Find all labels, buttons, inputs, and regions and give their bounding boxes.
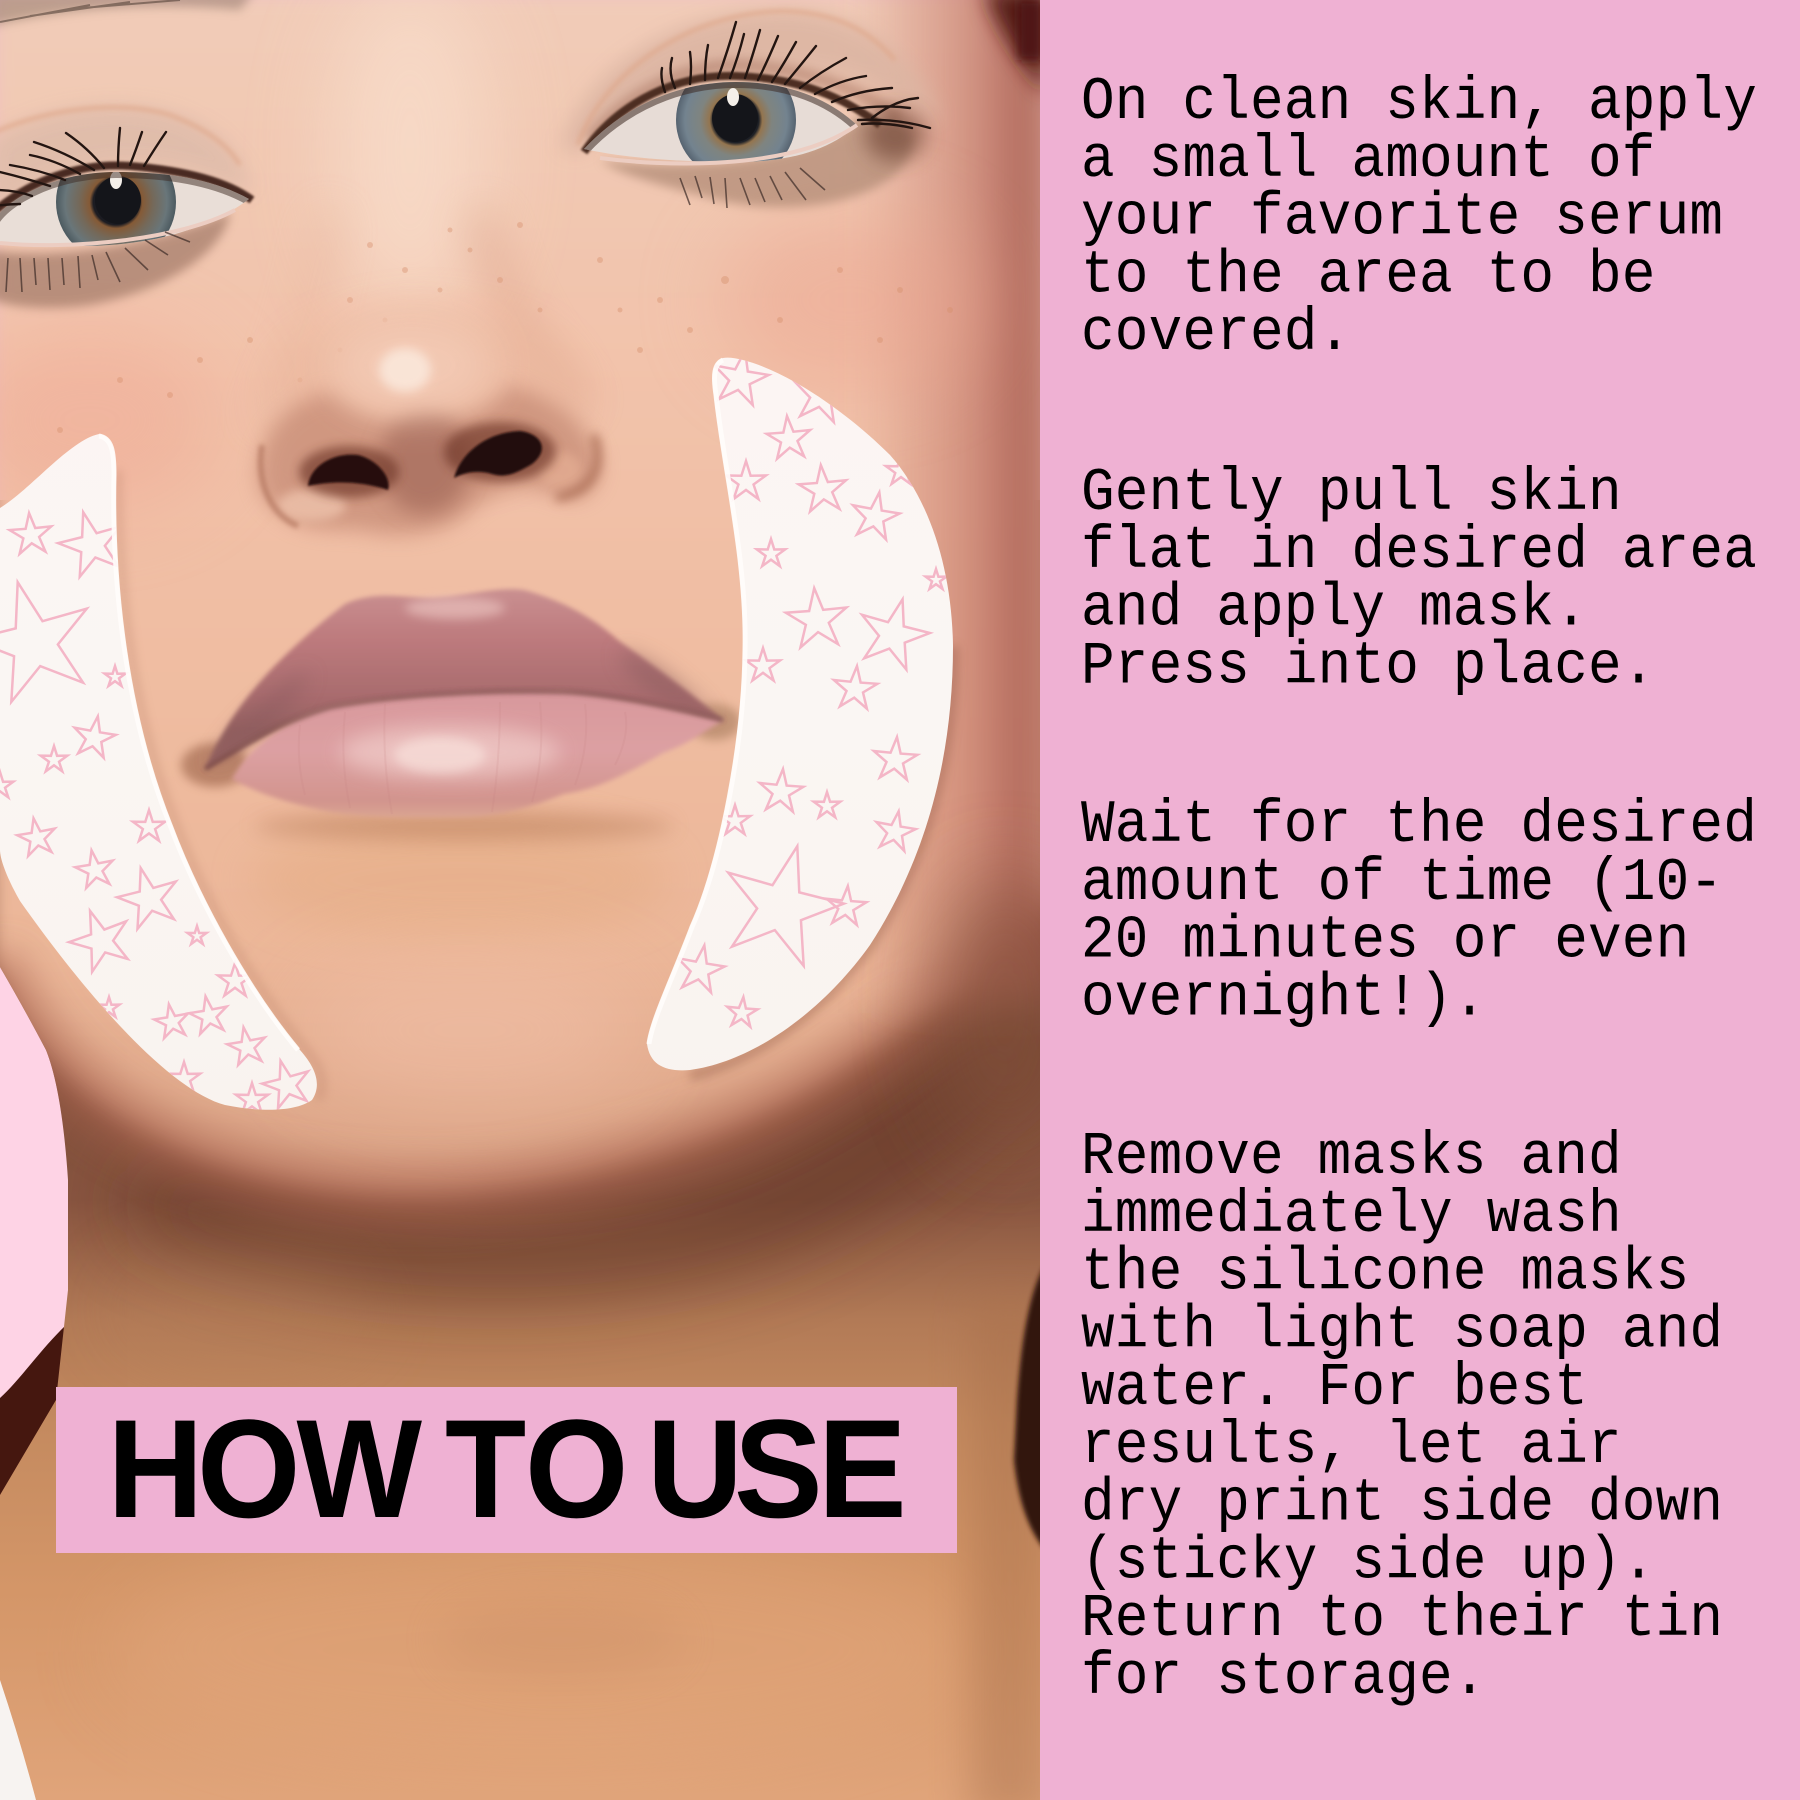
- left mask edge highlight: [99, 436, 298, 1050]
- right mask shadow: [690, 646, 953, 1076]
- step 1 text: your favorite serum: [1081, 185, 1723, 252]
- nose underside: [258, 385, 600, 535]
- left mask shadow: [118, 470, 322, 1100]
- step 3 text: Wait for the desired: [1081, 792, 1757, 860]
- left wing lit area: [278, 489, 346, 521]
- right cheek mask: [647, 346, 953, 1076]
- right jaw dark shading: [935, 870, 1075, 1150]
- right catchlight: [727, 88, 739, 106]
- left cheek warmth: [0, 344, 191, 485]
- title banner: [56, 1387, 957, 1553]
- freckles: [57, 222, 953, 433]
- step 4 text: dry print side down: [1081, 1471, 1723, 1538]
- lower lip highlight: [340, 726, 560, 778]
- step 1 text: covered.: [1081, 301, 1351, 368]
- left cheek mask: [0, 434, 322, 1114]
- step 1 text: to the area to be: [1081, 243, 1656, 310]
- right lashes: [661, 22, 930, 128]
- studio pink background: [0, 968, 68, 1398]
- right nostril: [454, 431, 542, 478]
- left lashes: [0, 128, 166, 206]
- nostril halos: [299, 446, 399, 498]
- step 4 text: the silicone masks: [1081, 1240, 1689, 1307]
- panel: instructions background: [1040, 0, 1800, 1800]
- step 4 text: for storage.: [1081, 1644, 1487, 1712]
- left iris: [56, 142, 176, 262]
- neck tone variation: [110, 1260, 370, 1360]
- upper lip darker left end: [210, 670, 310, 765]
- face shape: [0, 0, 1050, 1195]
- skin: face and neck: [0, 0, 1075, 1800]
- left eyeball: [0, 142, 260, 262]
- right crease: [578, 11, 895, 145]
- step 2 text: and apply mask.: [1081, 576, 1588, 643]
- neck jaw shadow: [140, 1020, 1040, 1257]
- nose side shade left: [262, 210, 330, 425]
- right under eye: [600, 118, 912, 207]
- step 1 text: a small amount of: [1081, 127, 1656, 194]
- right wing lit area: [538, 452, 582, 488]
- nose side shade right: [480, 210, 585, 410]
- right mask edge highlight: [649, 360, 745, 1044]
- lip parting line: [205, 692, 723, 769]
- step 4 text: Return to their tin: [1081, 1587, 1723, 1654]
- step 4 text: with light soap and: [1081, 1298, 1723, 1365]
- right lid darker band: [590, 66, 900, 140]
- nose tip shading between nostrils: [379, 410, 471, 514]
- chin blush: [346, 998, 594, 1092]
- step 2 text: Press into place.: [1081, 634, 1656, 701]
- nose ball: [275, 310, 575, 480]
- step 3 text: amount of time (10-: [1081, 850, 1723, 917]
- left mouth corner shadow: [181, 743, 249, 787]
- step 4 text: (sticky side up).: [1081, 1529, 1656, 1596]
- left pupil: [95, 176, 141, 224]
- right cheek rosy shading: [872, 0, 1040, 998]
- upper lip darker right end: [620, 650, 715, 716]
- left wing line: [261, 445, 298, 526]
- hair on right of neck: [1014, 1265, 1045, 1550]
- upper lip highlight: [405, 597, 505, 619]
- left nostril: [308, 455, 389, 490]
- left catchlight: [110, 171, 122, 189]
- right iris: [676, 60, 796, 180]
- banner background: [56, 1387, 957, 1553]
- step 4 text: Remove masks and: [1081, 1124, 1622, 1192]
- hair on left of neck: [0, 1327, 64, 1495]
- hair at top right: [985, 0, 1045, 95]
- white shirt corner: [0, 1680, 36, 1800]
- step 2 text: Gently pull skin: [1081, 460, 1622, 528]
- step 3 text: overnight!).: [1081, 966, 1487, 1033]
- eyebrow: [0, 0, 255, 26]
- left mask shape: [0, 434, 317, 1110]
- photo: model wearing star cheek masks: [0, 0, 1075, 1800]
- upper lip: [205, 589, 723, 769]
- neck: [0, 500, 1040, 1800]
- right pupil: [712, 94, 758, 142]
- right eye: [560, 10, 940, 208]
- left mask stars: [0, 504, 315, 1114]
- forehead nose bridge highlight: [330, 0, 490, 320]
- step 2 text: flat in desired area: [1081, 518, 1757, 585]
- skin below lips warm tone: [270, 838, 650, 926]
- left lower rim: [0, 210, 235, 245]
- nose: [258, 210, 600, 535]
- step 1 text: On clean skin, apply: [1081, 69, 1757, 137]
- right cheek warmth: [732, 210, 894, 381]
- left eye: [0, 106, 260, 308]
- left crease: [0, 107, 240, 165]
- right eyeball: [570, 60, 870, 180]
- lips: [181, 589, 741, 840]
- right lower rim: [600, 125, 857, 163]
- right mask shape: [647, 358, 953, 1070]
- step 4 text: immediately wash: [1081, 1182, 1622, 1249]
- nose top lit ball: [332, 317, 492, 413]
- lower lip creases: [299, 702, 626, 814]
- right inner lid shadow: [584, 76, 880, 152]
- left inner lid shadow: [0, 165, 252, 215]
- nose highlight: [379, 348, 431, 392]
- step 4 text: water. For best: [1081, 1356, 1588, 1423]
- right eyelid shimmer: [560, 10, 940, 152]
- lip shadow: [254, 812, 674, 840]
- left eyelid shimmer: [0, 106, 250, 220]
- chin shading: [0, 900, 1050, 1195]
- right mask stars: [673, 346, 946, 1027]
- step 4 text: results, let air: [1081, 1413, 1622, 1480]
- step 3 text: 20 minutes or even: [1081, 908, 1689, 975]
- lower lip: [232, 692, 723, 817]
- right mouth corner shadow: [689, 704, 741, 740]
- right wing line: [556, 435, 598, 498]
- left under eye: [0, 212, 230, 308]
- heading: how to use: HOW TO USE: [107, 1390, 907, 1547]
